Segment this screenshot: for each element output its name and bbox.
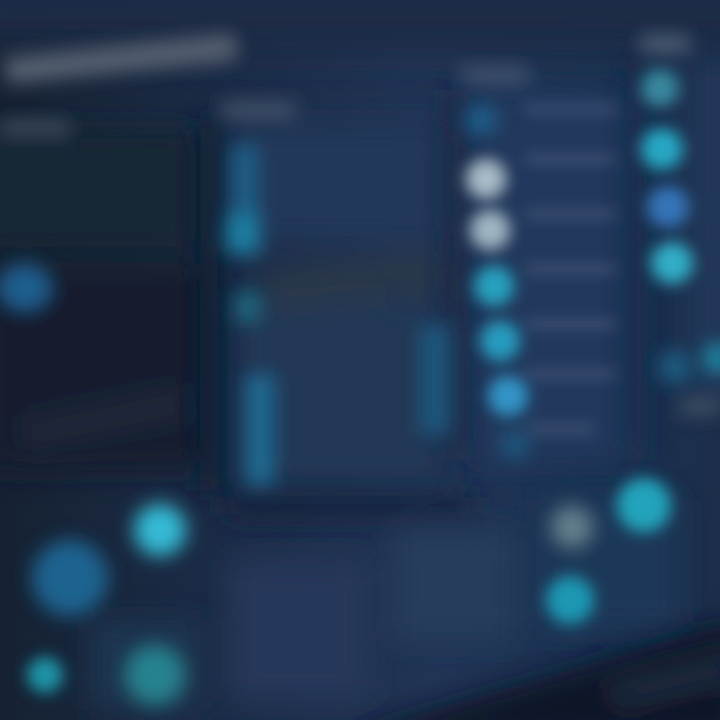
glow teal (546, 576, 594, 624)
dot grey (470, 210, 510, 250)
dot grey (466, 159, 506, 199)
glow large (32, 540, 108, 616)
centre column bars (226, 145, 450, 485)
dot dark blue (465, 104, 497, 136)
panel: centre column (225, 125, 450, 490)
right bottom light streak (600, 655, 720, 705)
bottom right dark wedge (330, 620, 720, 720)
right status dots (641, 69, 720, 383)
heading bar (4, 34, 238, 84)
glow small (27, 657, 63, 693)
dot cyan (480, 321, 520, 361)
dot cyan (641, 128, 683, 170)
left accent dot (0, 264, 53, 312)
panel: right list column (470, 60, 720, 460)
dot teal (641, 69, 679, 107)
dot blue (488, 376, 528, 416)
glow grey (551, 506, 593, 548)
panel: left column (0, 130, 200, 470)
glow soft (125, 645, 185, 705)
panel: bottom cards (90, 500, 680, 710)
list text lines (525, 105, 615, 433)
dot blue (647, 186, 689, 228)
dot faint (501, 431, 529, 459)
glow bright (134, 504, 186, 556)
bottom glow circles (27, 478, 671, 705)
glow cyan right (617, 478, 671, 532)
dot cyan (474, 266, 514, 306)
list status dots (465, 104, 529, 459)
dot edge (703, 343, 720, 373)
small headings (0, 36, 720, 414)
vertical shadows (198, 60, 640, 517)
dot faint (659, 351, 691, 383)
dot cyan (651, 242, 693, 284)
top band (0, 0, 720, 50)
